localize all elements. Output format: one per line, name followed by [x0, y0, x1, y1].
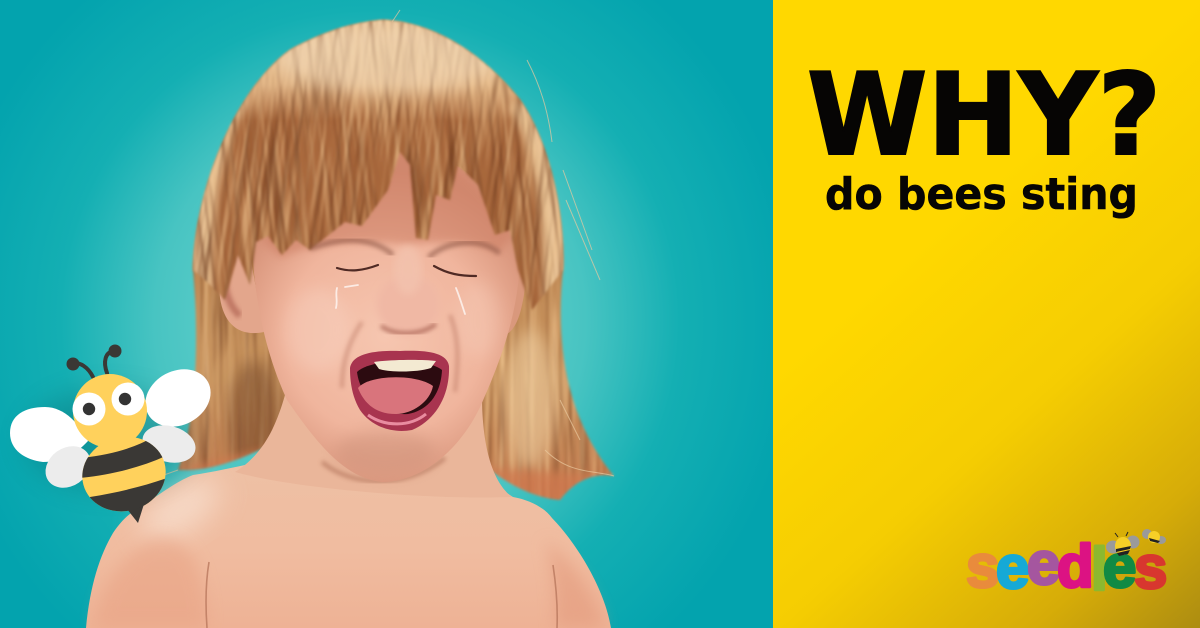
heading: WHY?: WHY? [807, 49, 1161, 181]
neck shadow [322, 458, 445, 481]
logo: seedles [966, 529, 1167, 603]
nose [377, 245, 439, 335]
logo wordmark: e [1103, 533, 1136, 600]
logo wordmark: e [1027, 530, 1060, 597]
forehead shade [262, 150, 512, 258]
arm creases [206, 562, 557, 628]
brows and closed eyes [312, 240, 498, 314]
shoulders and chest [86, 450, 611, 628]
bee shadow [25, 390, 195, 490]
lower wings [37, 438, 99, 496]
panel: teal photo background [0, 0, 773, 628]
stray hairs [150, 10, 614, 480]
cheek folds [342, 315, 457, 392]
face [252, 145, 520, 482]
photo: crying child [86, 0, 639, 628]
logo bee large [1106, 532, 1140, 556]
ears [219, 249, 264, 333]
logo wordmark: s [966, 533, 999, 600]
logo wordmark: l [1091, 536, 1108, 603]
antennae [72, 351, 114, 377]
stinger [127, 504, 144, 523]
arm shading [95, 538, 207, 628]
logo wordmark: d [1057, 533, 1094, 600]
logo bee small [1142, 529, 1166, 544]
neck [235, 395, 512, 498]
shoulder highlight [131, 466, 229, 554]
back hair [177, 18, 615, 502]
body [74, 427, 174, 521]
cheek light [286, 288, 350, 372]
logo wordmark: e [996, 534, 1029, 601]
icon: cartoon bee [10, 344, 221, 523]
panel: yellow sidebar [773, 0, 1200, 628]
mouth [350, 351, 449, 431]
stripes [82, 441, 165, 512]
subheading: do bees sting: do bees sting [825, 170, 1138, 220]
logo wordmark: s [1134, 534, 1167, 601]
fringe [191, 18, 565, 310]
eyes [72, 392, 106, 426]
chin shade [335, 430, 435, 474]
upper wings [10, 407, 88, 462]
head [73, 374, 147, 448]
